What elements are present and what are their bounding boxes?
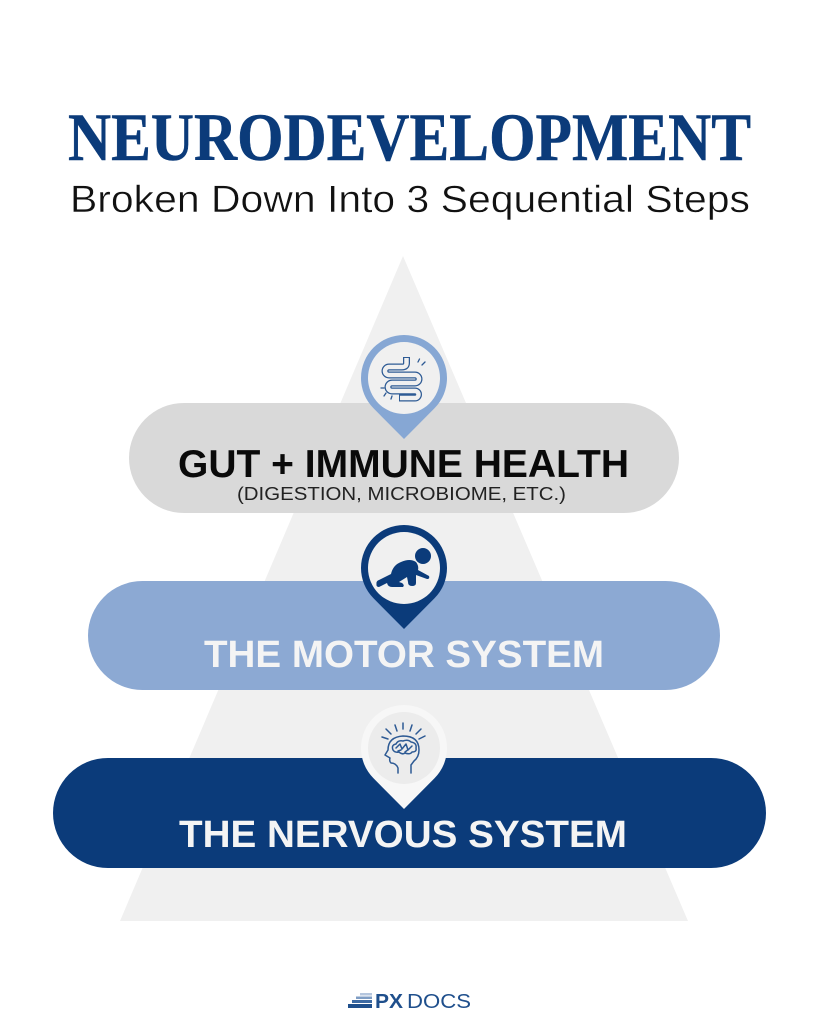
panel: nervous system <box>53 705 766 868</box>
pill: gut <box>129 403 679 513</box>
pill: motor <box>88 581 720 690</box>
text: PX: PX <box>375 991 404 1013</box>
heading: gut and immune health: GUT + IMMUNE HEALTH <box>178 443 629 486</box>
icon: brain head pin <box>361 705 447 809</box>
icon: gut pin <box>361 335 447 439</box>
subtitle: Broken Down Into 3 Sequential Steps <box>70 179 750 221</box>
text: DOCS: DOCS <box>407 991 471 1013</box>
logo: PX Docs <box>348 991 471 1013</box>
background pyramid <box>120 256 688 921</box>
text: digestion note: (DIGESTION, MICROBIOME, ETC.) <box>237 484 566 504</box>
heading: nervous system: THE NERVOUS SYSTEM <box>179 814 627 856</box>
heading: motor system: THE MOTOR SYSTEM <box>204 634 604 676</box>
panel: motor system <box>88 525 720 690</box>
icon: crawling baby pin <box>361 525 447 629</box>
icon: logo steps <box>348 993 372 1008</box>
panel: gut and immune health <box>129 335 679 513</box>
pill: nervous <box>53 758 766 868</box>
